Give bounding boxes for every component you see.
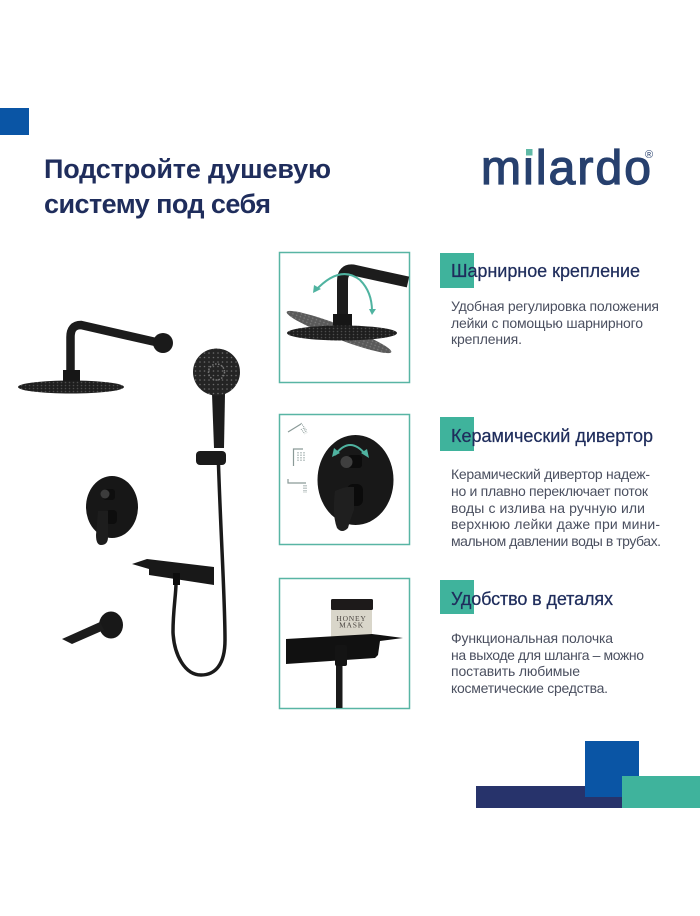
product: full shower set [18,325,240,675]
rain shower head with arm [18,325,173,394]
shelf with hose outlet [132,559,214,585]
title: систему под себя [44,189,271,219]
text: shelf detail: на выходе для шланга – можно [451,647,644,663]
heading: shelf detail: Удобство в деталях [451,589,613,609]
text: swivel joint: крепления. [451,331,522,347]
mixer plate [318,435,394,525]
teal marker 3 [440,580,474,614]
hose [336,660,342,708]
text: ceramic diverter: Керамический дивертор надеж- [451,466,650,482]
text: ceramic diverter: мальном давлении воды в трубах. [451,533,661,549]
text: shelf detail: Функциональная полочка [451,630,613,646]
bath spout [62,612,123,644]
text: shelf detail [451,630,644,696]
icon: spout [288,479,306,493]
hand shower and holder [193,348,240,465]
text: shelf detail: поставить любимые [451,663,580,679]
shelf [286,634,403,666]
title [44,154,331,219]
text: swivel joint: лейки с помощью шарнирного [451,315,643,331]
logo: milardo: ® [645,149,653,161]
mixer handle [334,487,354,531]
text: ceramic diverter: воды с излива на ручную или [451,500,645,516]
flexible hose [173,465,225,675]
icon: shower head [288,423,307,434]
text: swivel joint: Удобная регулировка положения [451,298,659,314]
jar: Honey Mask: MASK [339,620,364,630]
text: ceramic diverter [451,466,661,549]
panel: shelf detail [280,578,410,708]
icon: shower column [294,449,304,466]
tilted shower head [284,305,394,359]
decorative blue square [0,108,29,135]
panel: ceramic diverter [280,414,410,544]
teal marker 1 [440,253,474,288]
text: ceramic diverter: но и плавно переключает поток [451,483,649,499]
logo: milardo: milardo [481,142,651,195]
diverter mixer [86,476,138,545]
heading: swivel joint: Шарнирное крепление [451,261,640,281]
shower head [287,326,397,340]
panel: swivel joint [280,252,410,382]
rotation arrow [332,445,369,458]
jar: Honey Mask: HONEY [336,614,367,623]
text: shelf detail: косметические средства. [451,680,608,696]
text: ceramic diverter: верхнюю лейки даже при мини- [451,516,660,532]
teal marker 2 [440,417,474,451]
shower arm [342,270,408,316]
decorative blocks bottom right [476,741,700,808]
heading: ceramic diverter: Керамический дивертор [451,426,653,446]
text: swivel joint [451,298,659,347]
rotation arrow [313,274,376,315]
jar: Honey Mask [331,599,373,639]
title: Подстройте душевую [44,154,331,184]
